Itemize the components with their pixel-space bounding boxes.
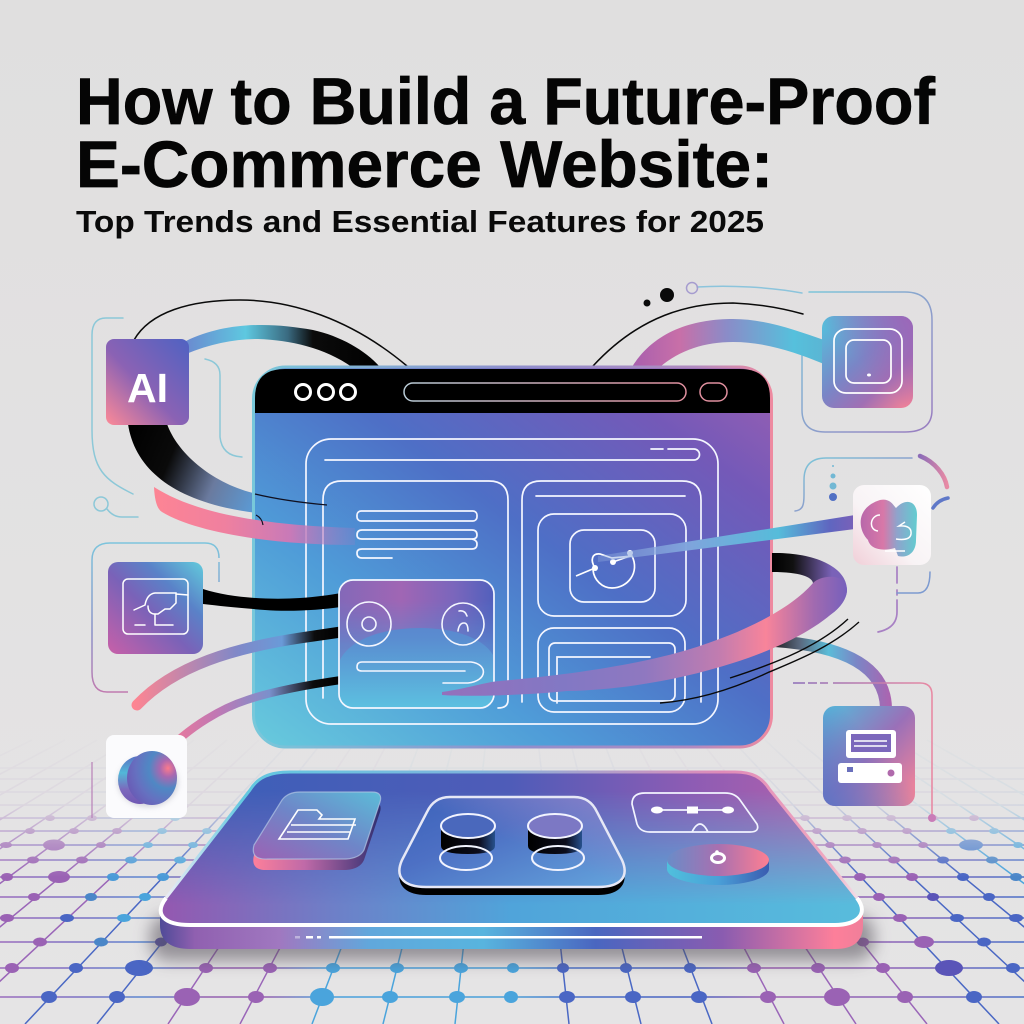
- vertical status dots: [829, 465, 837, 501]
- ball card: [106, 735, 187, 818]
- thin black accent in window: [255, 494, 327, 525]
- document icon: [279, 810, 356, 839]
- platform rim bottom: [161, 898, 862, 925]
- ribbon: pink tail to card: [137, 632, 341, 705]
- terminal icon: [838, 730, 902, 783]
- platform surface: [162, 772, 861, 925]
- thin connector lines: left: [92, 318, 242, 517]
- ribbon: from ball to card: [162, 680, 341, 756]
- AI card: [106, 339, 189, 425]
- platform side progress line: [295, 936, 702, 938]
- ribbon: black connector from left card: [203, 589, 341, 611]
- small node line left: [91, 762, 93, 818]
- thin motion lines: [660, 619, 859, 703]
- title: [76, 64, 936, 201]
- address bar: [404, 383, 686, 401]
- chip icon: [834, 329, 902, 393]
- ribbon: AI card to window top: [186, 325, 380, 367]
- route tile: [632, 793, 758, 832]
- lower right terminal card: [823, 706, 915, 806]
- perspective network grid floor: [0, 770, 1024, 1024]
- center cylinders tile: [399, 797, 625, 895]
- cloud blob icon: [861, 500, 917, 557]
- diagram icon: [123, 579, 188, 634]
- ribbon: black band right of window: [772, 553, 847, 615]
- window control dots: [296, 384, 356, 400]
- ribbon: AI card down into window: [128, 424, 335, 517]
- top right chip card: [822, 316, 913, 408]
- ribbon: cloud card to icon tile: [598, 515, 855, 562]
- ribbon: pink swoosh into window: [154, 487, 355, 545]
- browser window: [254, 367, 772, 747]
- cloud glyph strokes: [871, 515, 911, 551]
- bracket lines around cloud card: [795, 456, 948, 632]
- ribbon: large swoosh across window: [442, 577, 847, 696]
- ribbon: lower right connector: [775, 641, 886, 708]
- page wireframe: [306, 439, 718, 724]
- cloud card: [853, 485, 931, 565]
- feature card in window: [339, 580, 494, 708]
- ball icon: [118, 757, 178, 807]
- cat-like glyph in icon tile: [576, 550, 635, 588]
- base platform: [150, 772, 874, 961]
- thin black arc above AI card: [134, 300, 407, 366]
- dash-dot connector lower right: [793, 683, 936, 822]
- decorative dots: [644, 288, 674, 306]
- document tile: [253, 792, 381, 870]
- platform shadow: [150, 915, 874, 961]
- AI label: AI: [127, 365, 168, 411]
- title: How to Build a Future-Proof: [76, 64, 936, 138]
- left mid frame line: [92, 543, 219, 692]
- thin connector lines: top right: [593, 282, 932, 432]
- title: E-Commerce Website:: [76, 127, 773, 201]
- header button: [700, 383, 727, 401]
- platform side: [160, 905, 863, 949]
- subtitle: Top Trends and Essential Features for 2025: [76, 204, 764, 239]
- window header bar: [255, 369, 770, 413]
- cylinder icons: [440, 814, 584, 870]
- ribbon: top right card to window: [632, 319, 824, 367]
- disc button: [667, 844, 769, 885]
- platform rim top: [166, 772, 857, 898]
- card icons and text lines: [347, 602, 484, 683]
- left diagram card: [108, 562, 203, 654]
